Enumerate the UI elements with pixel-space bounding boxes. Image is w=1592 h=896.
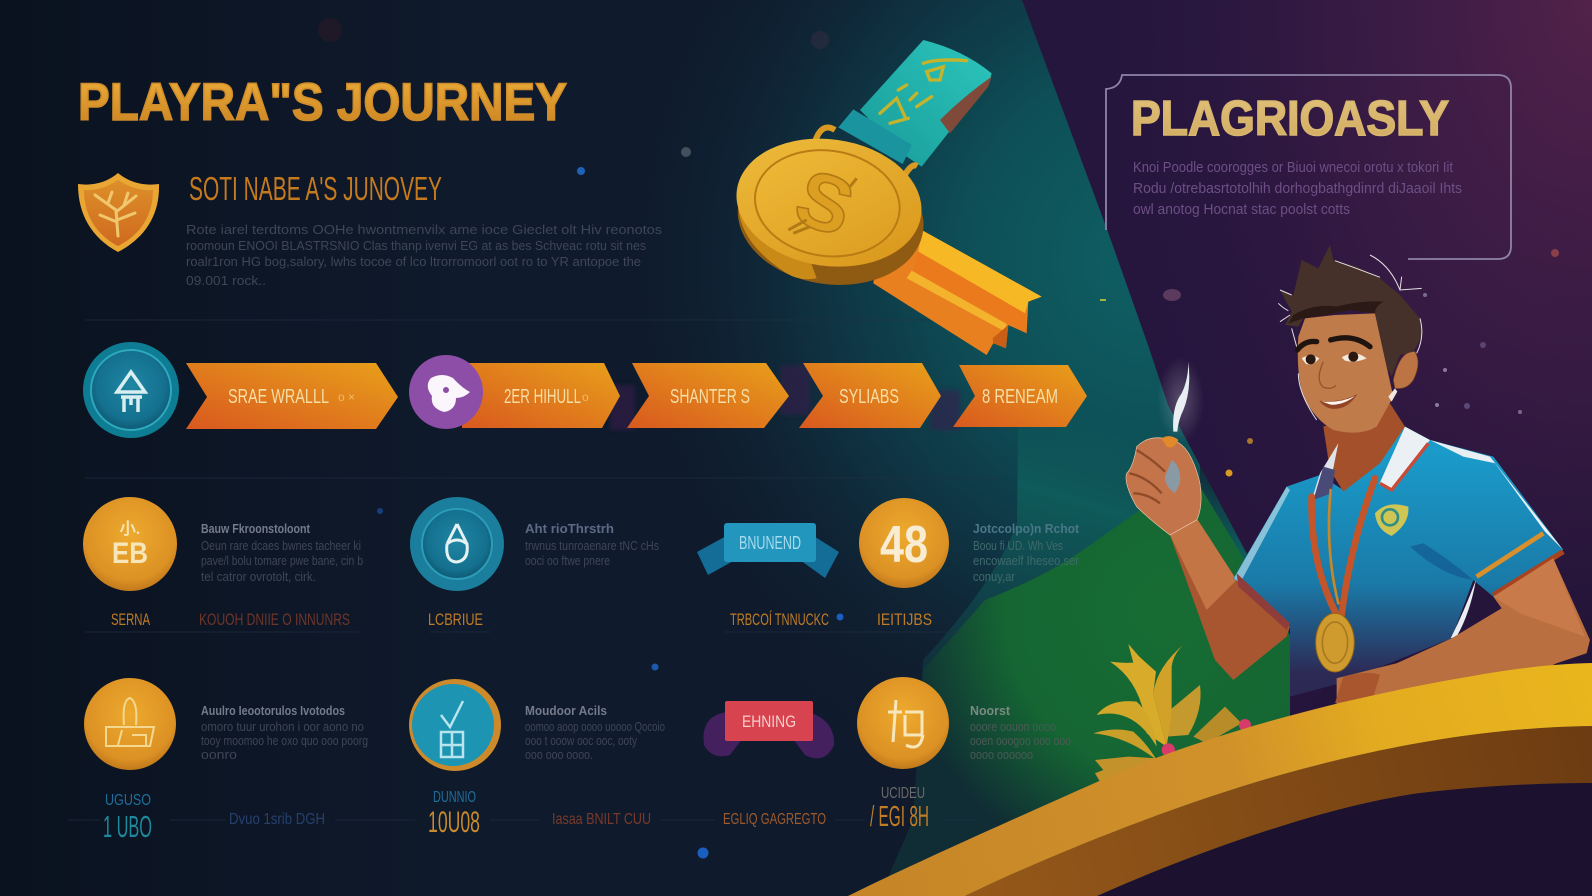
text block 2: Aht rioThrstrh (525, 522, 614, 536)
banner: red: EHNING (742, 712, 796, 731)
text block 2: trwnus tunroaenare tNC cHs (525, 539, 659, 553)
row 1 (83, 497, 1080, 629)
medal loops (815, 128, 917, 185)
icon: gold coin 3 (84, 678, 176, 770)
medal lanyard (1312, 478, 1375, 615)
bottom stats (103, 785, 929, 844)
chevron timeline (83, 342, 1087, 438)
text block 3: encowaelf Iheseo,ser (973, 554, 1079, 568)
chevron 4: SYLIABS (839, 386, 899, 408)
row 1 labels: LCBRIUE (428, 610, 483, 629)
text block 2: ooci oo ftwe pnere (525, 554, 610, 568)
text block 5: ooo t ooow ooc ooc, ooty (525, 734, 638, 748)
icon: gold coin 5 (857, 677, 949, 769)
icon: teal badge (83, 342, 179, 438)
chevron 1 (186, 363, 398, 429)
eyebrows (1297, 338, 1370, 350)
head (1278, 245, 1422, 433)
hair and face outline (1278, 255, 1422, 420)
hand with pendant (1126, 436, 1201, 535)
face (1298, 313, 1393, 433)
text block 6: ooore oouon oooo (970, 720, 1056, 734)
bottom stats: DUNNIO (433, 789, 476, 806)
text block 6: oooo oooooo (970, 748, 1033, 762)
hair shadow (1288, 301, 1383, 323)
row 1 labels (111, 610, 932, 629)
band brown underside (965, 726, 1592, 896)
dark floor under band (1097, 783, 1592, 896)
torso shirt (1233, 427, 1563, 697)
text block 6: ooen ooogoo ooo ooo (970, 734, 1071, 748)
medal coin (728, 127, 932, 297)
text block 5 (525, 704, 665, 762)
chevron 2: 2ER HIHULL (504, 386, 581, 408)
jaw highlight (1388, 388, 1397, 402)
panel text: Knoi Poodle coorogges or Biuoi wnecoi orotu x tokori Iit (1133, 159, 1454, 176)
text block 4: tooy moomoo he oxo quo ooo poorg (201, 734, 368, 748)
chevron 5 (953, 365, 1087, 427)
banner: teal: BNUNEND (739, 533, 801, 553)
text block 3: conuy,ar (973, 570, 1015, 584)
collar (1312, 427, 1430, 500)
bottom stats: 10U08 (428, 806, 480, 839)
banner: red (704, 701, 834, 758)
icon: teal coin 4 (409, 679, 501, 771)
text block 2 (525, 522, 659, 568)
raised arm (1170, 518, 1290, 680)
eyes (1302, 352, 1367, 364)
plant (1093, 643, 1251, 782)
text block 4: oonro (201, 748, 237, 762)
shirt badge (1375, 504, 1408, 536)
row 1 labels: TRBCOÍ TNNUCKC (730, 610, 829, 629)
intro text block: Rote iarel terdtoms OOHe hwontmenvilx ame ioce Gieclet olt Hiv reonotos (186, 223, 662, 237)
bottom stats: Iasaa BNILT CUU (552, 811, 651, 828)
icon: gold coin 1 (83, 497, 177, 591)
chevron 4 (799, 363, 941, 428)
text block 1: pave/l bolu tomare pwe bane, cin b (201, 554, 363, 568)
hair (1280, 245, 1422, 377)
text block 3 (973, 522, 1080, 584)
sleeve stripes (1477, 533, 1563, 595)
intro text block: roalr1ron HG bog,salory, lwhs tocoe of lco ltrorromoorl oot ro to YR antopoe the (186, 255, 641, 269)
chevron 3 (627, 363, 789, 428)
title: PLAYRA"S JOURNEY (78, 73, 567, 132)
nose (1319, 362, 1336, 388)
character (1126, 357, 1590, 710)
ear (1393, 352, 1418, 389)
medal pendant (1316, 613, 1354, 672)
bottom stats: EGLIQ GAGREGTO (723, 811, 826, 828)
panel text (1133, 159, 1462, 218)
row 1 labels: IEITIJBS (877, 610, 932, 629)
bottom stats: UGUSO (105, 792, 151, 809)
text block 5: oomoo aoop oooo uoooo Qocoio (525, 720, 665, 734)
icon: gold coin 48: 48 (880, 516, 928, 574)
text block 5: Moudoor Acils (525, 704, 607, 718)
lines (68, 320, 1000, 820)
icon: teal coin 2 (410, 497, 504, 591)
medal upper ribbon (838, 40, 992, 167)
intro text block (186, 223, 662, 288)
chevron 2 (462, 363, 620, 428)
text block 1: tel catror ovrotolt, cirk. (201, 570, 316, 584)
row 1 labels: KOUOH DNIIE O INNUNRS (199, 610, 350, 629)
panel text: owl anotog Hocnat stac poolst cotts (1133, 201, 1350, 218)
text block 1: Oeun rare dcaes bwnes tacheer ki (201, 539, 361, 553)
text block 1: Bauw Fkroonstoloont (201, 522, 311, 536)
chevron 1: o × (338, 390, 355, 404)
text block 3: Jotccolpo)n Rchot (973, 522, 1080, 536)
bottom stats: 1 UBO (103, 809, 152, 844)
panel heading: PLAGRIOASLY (1131, 92, 1449, 146)
row 1 labels: SERNA (111, 610, 150, 629)
intro text block: 09.001 rock.. (186, 274, 266, 288)
text block 5: ooo ooo oooo. (525, 748, 593, 762)
text block 6 (970, 704, 1071, 762)
smile (1319, 394, 1357, 409)
text block 4: omoro tuur urohon i oor aono no (201, 720, 364, 734)
banner: teal (697, 523, 839, 578)
chevron 2: o (582, 390, 589, 404)
medal coin: S (784, 152, 865, 254)
icon: shield (78, 173, 159, 252)
panel text: Rodu /otrebasrtotolhih dorhogbathgdinrd diJaaoil Ihts (1133, 180, 1462, 197)
subheading: SOTI NABE A'S JUNOVEY (189, 170, 442, 207)
icon: gold coin 1: EB (112, 537, 148, 570)
text block 4 (201, 704, 368, 762)
bottom stats: UCIDEU (881, 785, 925, 802)
intro text block: roomoun ENOOI BLASTRSNIO Clas thanp ivenvi EG at as bes Schveac rotu sit nes (186, 239, 646, 253)
chevron 3: SHANTER S (670, 386, 750, 408)
smudges (610, 365, 960, 430)
decorative particles (318, 18, 1559, 859)
bottom stats: / EGI 8H (870, 801, 929, 833)
chevron 1: SRAE WRALLL (228, 386, 329, 408)
band golden top (848, 663, 1592, 896)
text block 6: Noorst (970, 704, 1011, 718)
medal lower ribbons (873, 230, 1042, 355)
text block 3: Boou fi UD. Wh Ves (973, 539, 1063, 553)
row 2 (84, 677, 1071, 844)
neck (1323, 403, 1405, 492)
spark wisp (1157, 357, 1204, 443)
icon: purple badge (409, 355, 483, 429)
text block 1 (201, 522, 363, 584)
right arm (1335, 558, 1590, 710)
bottom stats: Dvuo 1srib DGH (229, 811, 325, 828)
icon: gold coin 48 (859, 498, 949, 588)
swoosh band (848, 663, 1592, 896)
icon: gold coin 1: 小. (120, 520, 140, 538)
text block 4: Auulro Ieootorulos Ivotodos (201, 704, 345, 718)
panel: plagrioasly (1106, 75, 1511, 259)
medal illustration (728, 40, 1042, 355)
chevron 5: 8 RENEAM (982, 386, 1058, 408)
